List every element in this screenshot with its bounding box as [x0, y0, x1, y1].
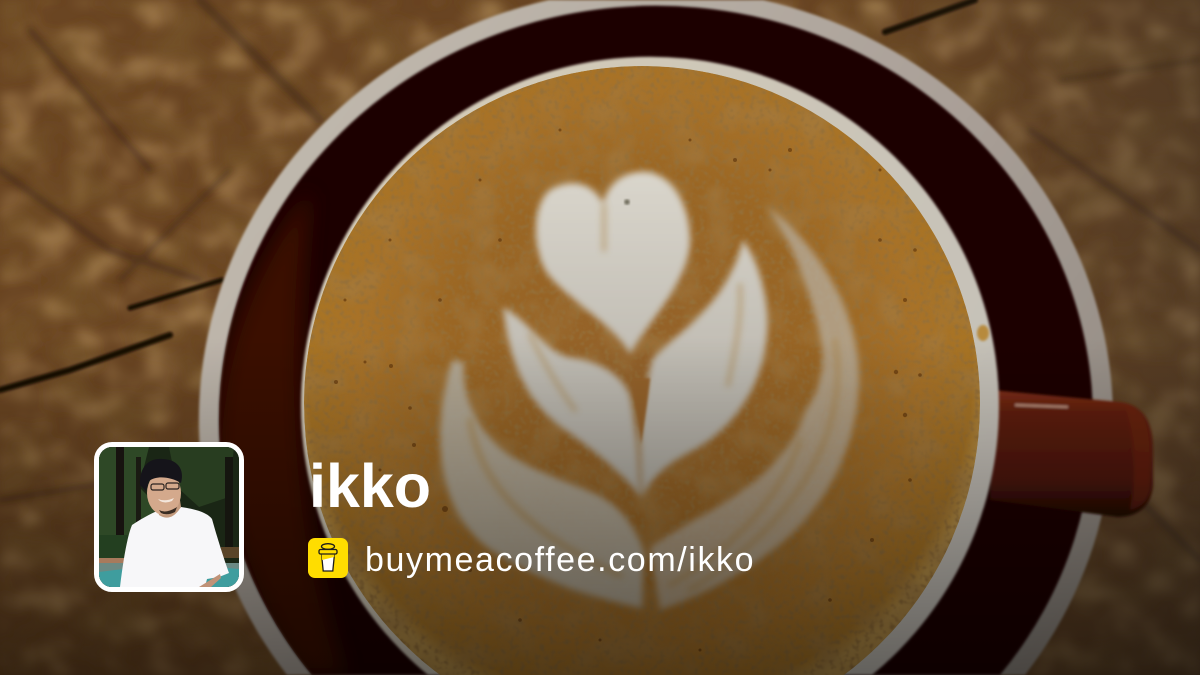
coffee crema	[300, 60, 1000, 675]
lower left milk band	[440, 360, 644, 608]
latte art milk shapes	[440, 172, 859, 610]
right outer swirl and lower right milk	[650, 207, 859, 610]
brown stem	[631, 378, 650, 445]
creator name: ikko	[309, 452, 431, 520]
foam speckles	[334, 124, 922, 652]
icon: coffee cup badge	[308, 538, 348, 578]
creator link row	[308, 538, 755, 579]
avatar photo: man in white t-shirt	[94, 442, 244, 592]
heart	[536, 172, 690, 354]
cup rim	[301, 57, 999, 675]
foam streaks in milk	[470, 205, 838, 590]
milk spot	[624, 199, 630, 205]
saucer	[199, 0, 1113, 675]
left leaf	[503, 307, 640, 498]
foam drip on rim	[977, 325, 989, 341]
cup handle	[990, 390, 1153, 517]
right leaf	[640, 240, 768, 498]
url text: buymeacoffee.com/ikko	[365, 541, 755, 579]
